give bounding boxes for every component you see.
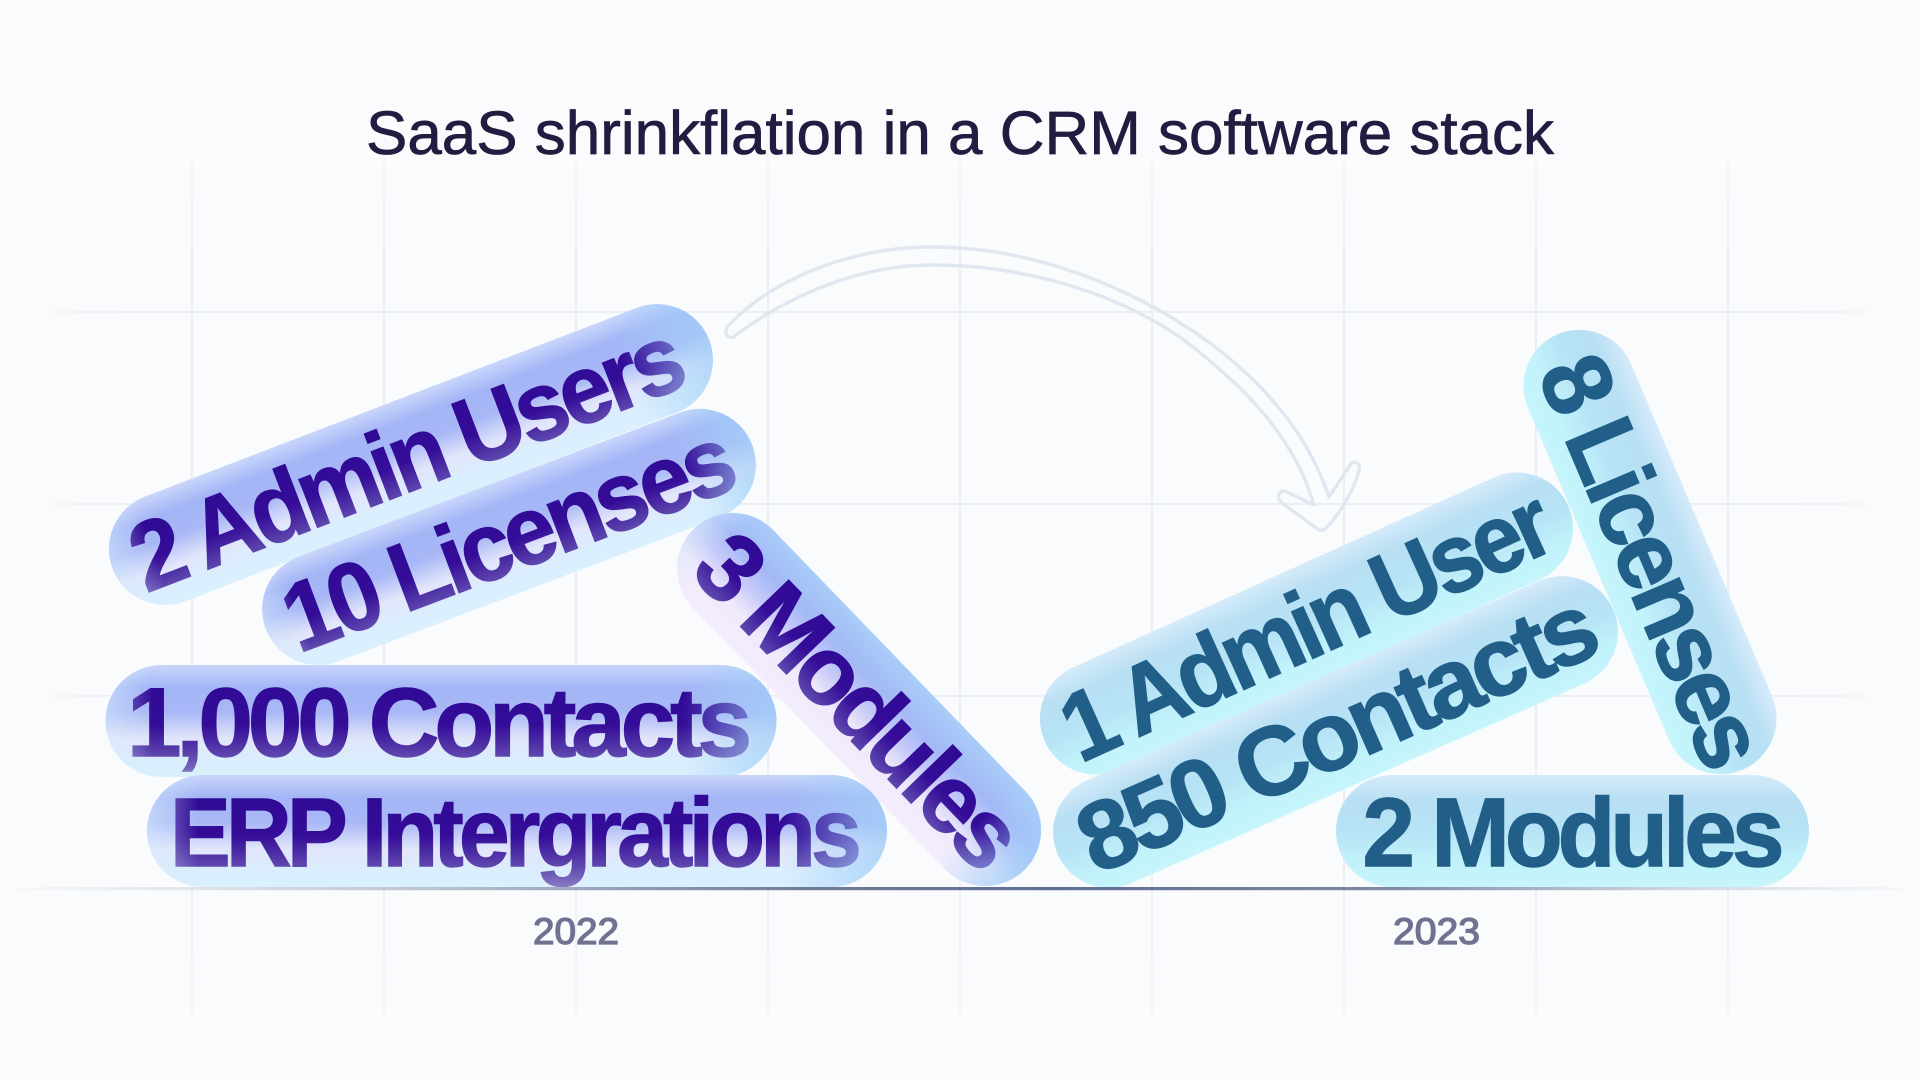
capsule: [246, 393, 772, 681]
capsule: [1022, 454, 1591, 793]
label: 2 Modules: [1362, 778, 1781, 887]
year label 2022: 2022: [533, 911, 619, 952]
capsule: [93, 288, 729, 621]
pill: 2 Modules: [1336, 775, 1809, 887]
capsule: [147, 775, 887, 887]
label: 8 Licenses: [1517, 339, 1787, 781]
label: 3 Modules: [673, 511, 1043, 888]
pill: 1,000 Contacts: [106, 665, 776, 777]
capsule: [106, 665, 776, 777]
label: 1 Admin User: [1044, 467, 1568, 783]
title: SaaS shrinkflation in a CRM software stack: [366, 99, 1555, 167]
arrow: 2022 to 2023: [726, 247, 1359, 530]
pill: 3 Modules: [654, 490, 1064, 909]
pill: 1 Admin User: [1022, 454, 1591, 793]
pill: ERP Intergrations: [147, 775, 887, 887]
pill: 2 Admin Users: [93, 288, 729, 621]
label: 850 Contacts: [1060, 572, 1610, 895]
axis baseline: [0, 887, 1920, 890]
year label 2023: 2023: [1393, 911, 1480, 952]
capsule: [1506, 312, 1794, 792]
label: 1,000 Contacts: [127, 668, 748, 777]
label: 2 Admin Users: [115, 303, 696, 613]
label: ERP Intergrations: [170, 778, 858, 887]
pill: 10 Licenses: [246, 393, 772, 681]
label: 10 Licenses: [267, 405, 747, 673]
capsule: [654, 490, 1064, 909]
capsule: [1336, 775, 1809, 887]
pill: 850 Contacts: [1035, 558, 1636, 906]
pill: 8 Licenses: [1506, 312, 1794, 792]
capsule: [1035, 558, 1636, 906]
